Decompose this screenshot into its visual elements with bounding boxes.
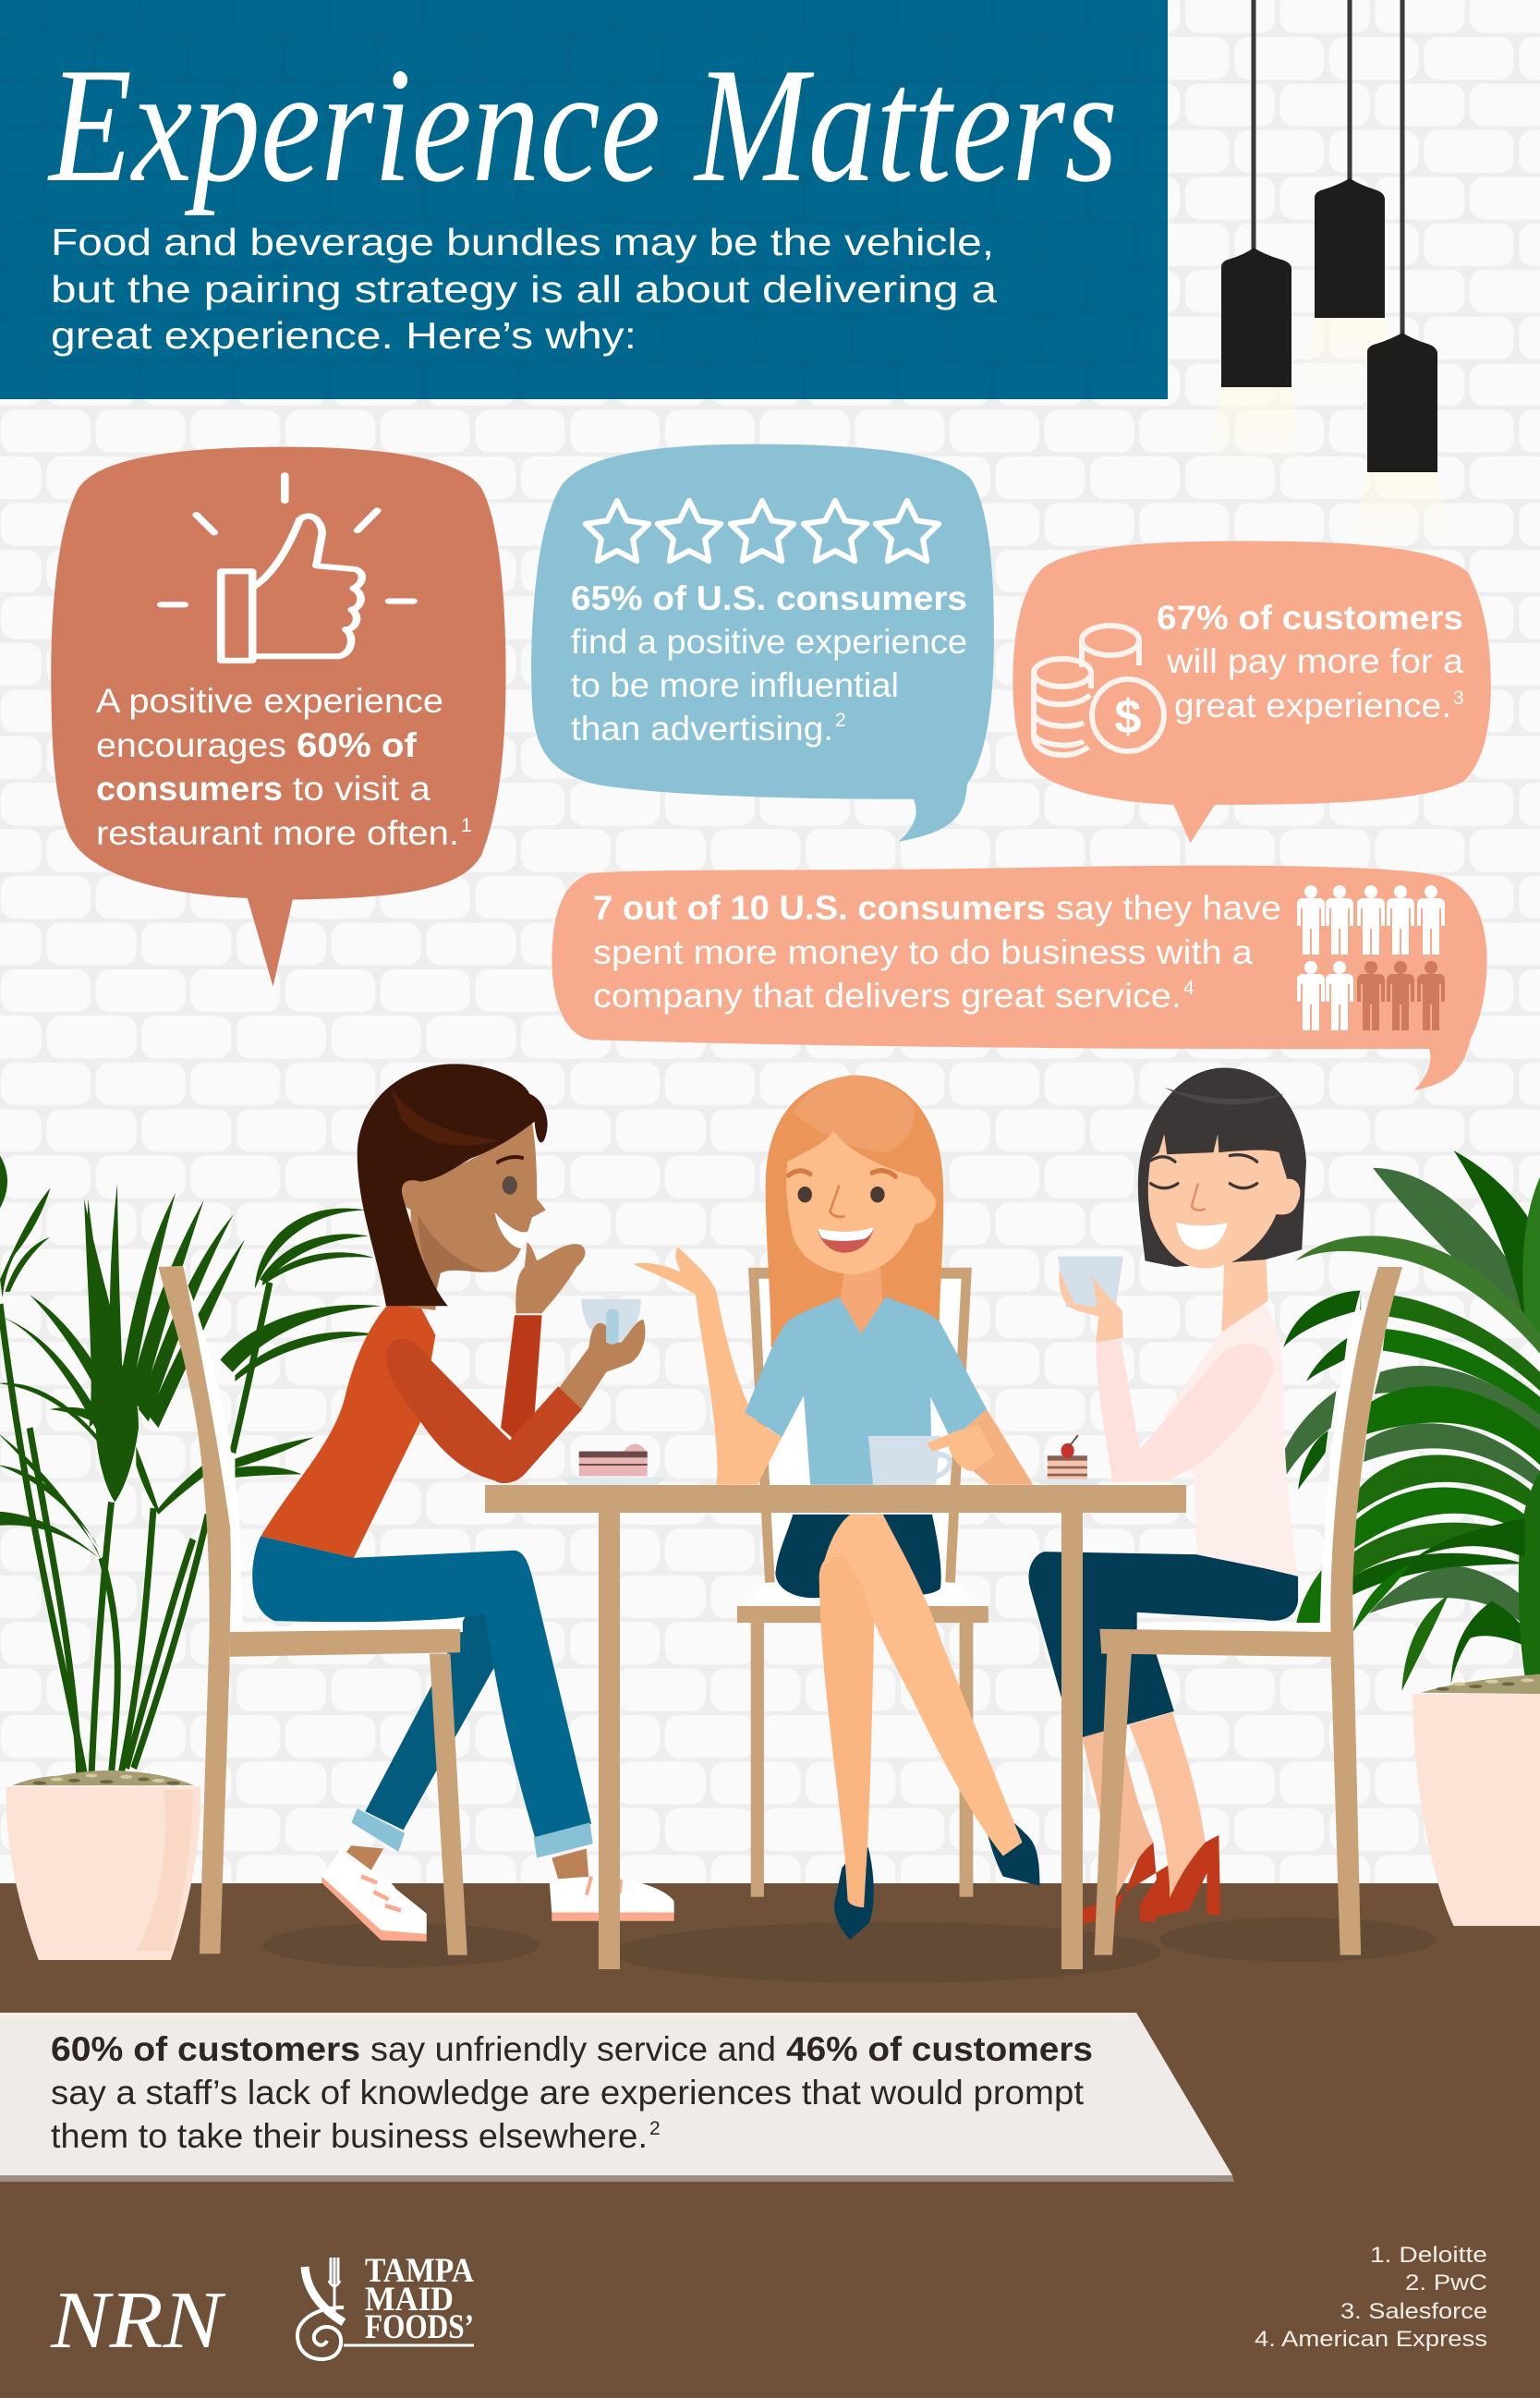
bubble text	[593, 889, 1281, 1015]
bubble text	[571, 579, 967, 748]
title: Experience Matters	[47, 33, 1118, 216]
bubble text: to visit a	[293, 770, 430, 808]
bubble text: A positive experience	[96, 682, 443, 720]
hand and cup	[1058, 1257, 1123, 1343]
legs	[819, 1553, 874, 1907]
right chair	[1095, 1267, 1402, 1955]
subtitle: Food and beverage bundles may be the vehicle,	[51, 221, 994, 263]
bubble text: 2	[835, 710, 846, 731]
sources list: 2. PwC	[1405, 2270, 1487, 2295]
bubble text: find a positive experience	[571, 623, 967, 661]
callout: unfriendly service statistic	[0, 2013, 1234, 2182]
bubble text: consumers	[96, 770, 283, 808]
icon: thumbs up	[161, 475, 414, 661]
heels	[1083, 1835, 1220, 1924]
sweater	[261, 1304, 435, 1558]
pendant lamps	[1207, 0, 1452, 545]
shoe: front	[550, 1877, 674, 1914]
icon: coins	[1034, 626, 1164, 755]
plant: right	[1272, 1150, 1540, 1926]
bubble text: than advertising.	[571, 710, 833, 748]
middle chair	[737, 1273, 988, 1897]
callout text	[51, 2030, 1093, 2155]
icon: coins: $	[1115, 690, 1142, 744]
plant: left	[0, 1156, 381, 1960]
bubble text	[1157, 599, 1464, 724]
logo: Tampa Maid Foods	[297, 2252, 474, 2359]
subtitle	[51, 221, 997, 357]
near arm and hand	[952, 1409, 1033, 1485]
face	[786, 1131, 936, 1335]
panel: positive experience speech bubble	[51, 447, 505, 987]
header banner	[0, 0, 1168, 399]
bubble text: restaurant more often.	[96, 814, 459, 852]
callout text: say unfriendly service and	[370, 2030, 776, 2068]
bubble text: 3	[1453, 688, 1464, 709]
pot: right	[1413, 1674, 1540, 1926]
shoe: back	[321, 1877, 427, 1942]
cup in hand	[559, 1299, 645, 1409]
table	[485, 1485, 1186, 1969]
bubble text: 60% of	[297, 726, 418, 764]
icon: five stars	[586, 501, 939, 561]
lower legs	[1083, 1725, 1153, 1898]
woman: left	[252, 1064, 674, 1942]
woman: center	[634, 1075, 1039, 1940]
subtitle: but the pairing strategy is all about delivering a	[51, 268, 997, 310]
skirt	[775, 1515, 941, 1598]
far leg	[365, 1613, 495, 1830]
bubble text: to be more influential	[571, 666, 899, 704]
sweater	[1164, 1304, 1298, 1576]
bubble text: great experience.	[1174, 687, 1451, 724]
raised hand	[515, 1242, 585, 1313]
icon: people pictogram 7 of 10	[1297, 885, 1445, 1030]
logo: Tampa Maid Foods: FOODS’	[365, 2308, 474, 2346]
icon: fork knife and spiral	[297, 2258, 474, 2359]
callout text: them to take their business elsewhere.	[51, 2117, 648, 2155]
callout text: 2	[649, 2118, 661, 2139]
panel: 67% speech bubble	[1013, 541, 1491, 843]
bubble text	[96, 682, 472, 852]
bubble text: 7 out of 10 U.S. consumers	[593, 889, 1046, 927]
sources list: 4. American Express	[1255, 2327, 1487, 2352]
logo: NRN: NRN	[50, 2276, 226, 2366]
hair back and face	[358, 1064, 548, 1310]
logo: Tampa Maid Foods: TAMPA	[365, 2252, 474, 2290]
callout text: say a staff’s lack of knowledge are experiences that would prompt	[51, 2074, 1085, 2112]
far hand and arm	[634, 1248, 782, 1485]
bubble text: 67% of customers	[1157, 599, 1463, 637]
callout text: 60% of customers	[51, 2030, 360, 2068]
bubble text: 1	[461, 815, 472, 836]
sources list: 3. Salesforce	[1340, 2299, 1487, 2324]
pot: left	[6, 1771, 200, 1960]
brick wall background	[0, 0, 1540, 1885]
bubble text: 4	[1183, 978, 1194, 999]
subtitle: great experience. Here’s why:	[51, 314, 637, 357]
panel: 65% speech bubble	[531, 444, 994, 842]
mug	[868, 1436, 950, 1485]
woman: right	[1029, 1067, 1306, 1924]
cake slice left	[562, 1444, 666, 1485]
trousers	[1029, 1552, 1298, 1737]
shoes	[834, 1847, 874, 1940]
floor shadows	[262, 1917, 1437, 1983]
sources list	[1255, 2243, 1487, 2352]
callout text: 46% of customers	[786, 2030, 1093, 2068]
logo: Tampa Maid Foods: MAID	[365, 2281, 454, 2319]
sources list: 1. Deloitte	[1370, 2243, 1487, 2268]
cake slice right	[1033, 1435, 1104, 1485]
bubble text: company that delivers great service.	[593, 977, 1182, 1015]
bubble text: say they have	[1056, 889, 1281, 927]
hair and face	[1138, 1067, 1306, 1269]
panel: 7 out of 10 speech bubble	[552, 866, 1487, 1090]
blue top	[745, 1296, 987, 1485]
floor	[0, 1883, 1540, 2398]
bubble text: encourages	[96, 726, 286, 764]
bubble text: spent more money to do business with a	[593, 933, 1253, 971]
bubble text: 65% of U.S. consumers	[571, 579, 967, 617]
jeans	[252, 1536, 591, 1839]
hair	[766, 1075, 943, 1347]
left chair	[158, 1266, 467, 1955]
bubble text: will pay more for a	[1166, 642, 1463, 680]
